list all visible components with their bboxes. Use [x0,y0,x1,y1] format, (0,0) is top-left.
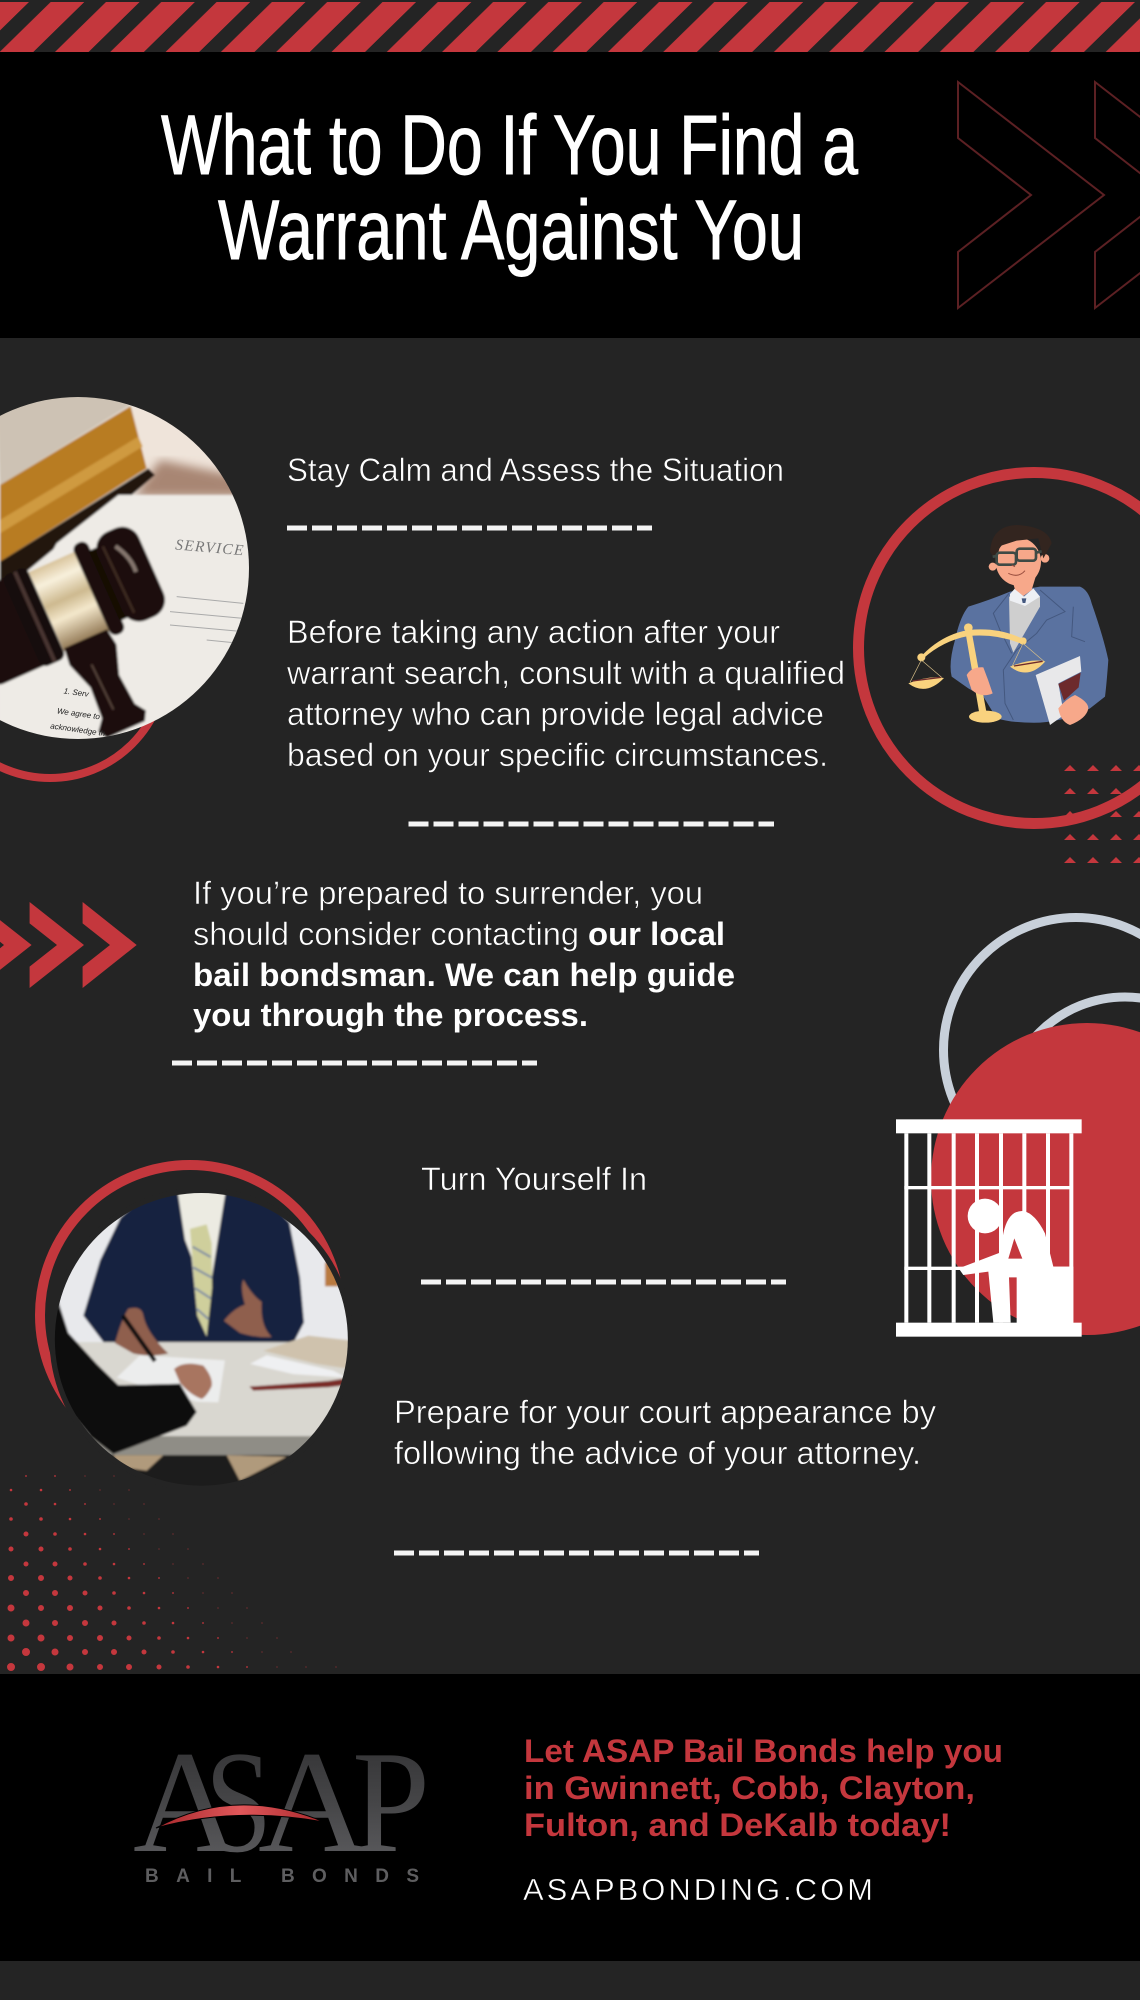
icon: lawyer with scales and book [908,525,1108,725]
text block: court appearance: following the advice of your attorney. [394,1435,921,1471]
text block: consult attorney: based on your specific circumstances. [287,737,828,773]
text block: consult attorney: Before taking any action after your [287,614,780,650]
logo: ASAP Bail Bonds: P [352,1721,430,1883]
text block: surrender [193,875,735,1033]
text block: surrender: you through the process. [193,997,588,1033]
call to action: Fulton, and DeKalb today! [524,1807,951,1843]
divider 5 [394,1550,759,1556]
panel: gavel photo with red ring: We agree to [56,706,101,721]
icon: outlined chevrons in header [958,82,1140,308]
logo: ASAP Bail Bonds: BAIL BONDS [145,1866,419,1887]
panel: gavel photo with red ring: acknowledge th [50,721,106,738]
logo: ASAP Bail Bonds [133,1721,430,1887]
call to action: in Gwinnett, Cobb, Clayton, [524,1770,975,1806]
heading: turn yourself in: Turn Yourself In [421,1161,647,1197]
icon: red chevrons [0,902,137,988]
title: What to Do If You Find a [161,98,858,192]
divider 1 [287,526,652,530]
call to action: Let ASAP Bail Bonds help you [524,1733,1003,1769]
call to action [524,1733,1003,1843]
divider 3 [172,1060,537,1066]
logo: ASAP Bail Bonds: S [205,1721,272,1883]
website url: ASAPBONDING.COM [523,1872,873,1907]
text block: consult attorney: attorney who can provide legal advice [287,696,824,732]
red ring around lawyer [858,472,1140,824]
panel: gavel photo with red ring: 1. Serv [63,686,90,699]
pattern: red halftone dots [11,1476,336,1667]
logo: ASAP Bail Bonds: A [133,1721,239,1883]
text block: consult attorney [286,614,845,773]
text block: surrender: should consider contacting [193,916,579,952]
icon: person behind bars [896,1119,1082,1337]
logo: ASAP Bail Bonds: A [258,1721,368,1883]
text block: surrender: If you’re prepared to surrender, you [193,875,703,911]
text block: court appearance: Prepare for your court appearance by [394,1394,936,1430]
pattern: red triangles [1064,765,1140,863]
text block: consult attorney: warrant search, consult with a qualified [286,655,845,691]
text block: surrender: bail bondsman. We can help guide [193,957,735,993]
text block: surrender: our local [588,916,725,952]
panel: gavel photo with red ring [0,397,249,782]
title [161,98,858,277]
divider 4 [421,1280,786,1284]
heading: stay calm: Stay Calm and Assess the Situation [287,452,784,488]
text block: court appearance [394,1394,936,1471]
header band [0,0,1140,338]
divider 2 [408,822,774,826]
footer band [0,1674,1140,1961]
panel: gavel photo with red ring: SERVICE [175,536,245,559]
panel: meeting photo with red ring [40,1165,357,1496]
title: Warrant Against You [218,183,804,277]
decorative circles behind jail [931,918,1140,1335]
